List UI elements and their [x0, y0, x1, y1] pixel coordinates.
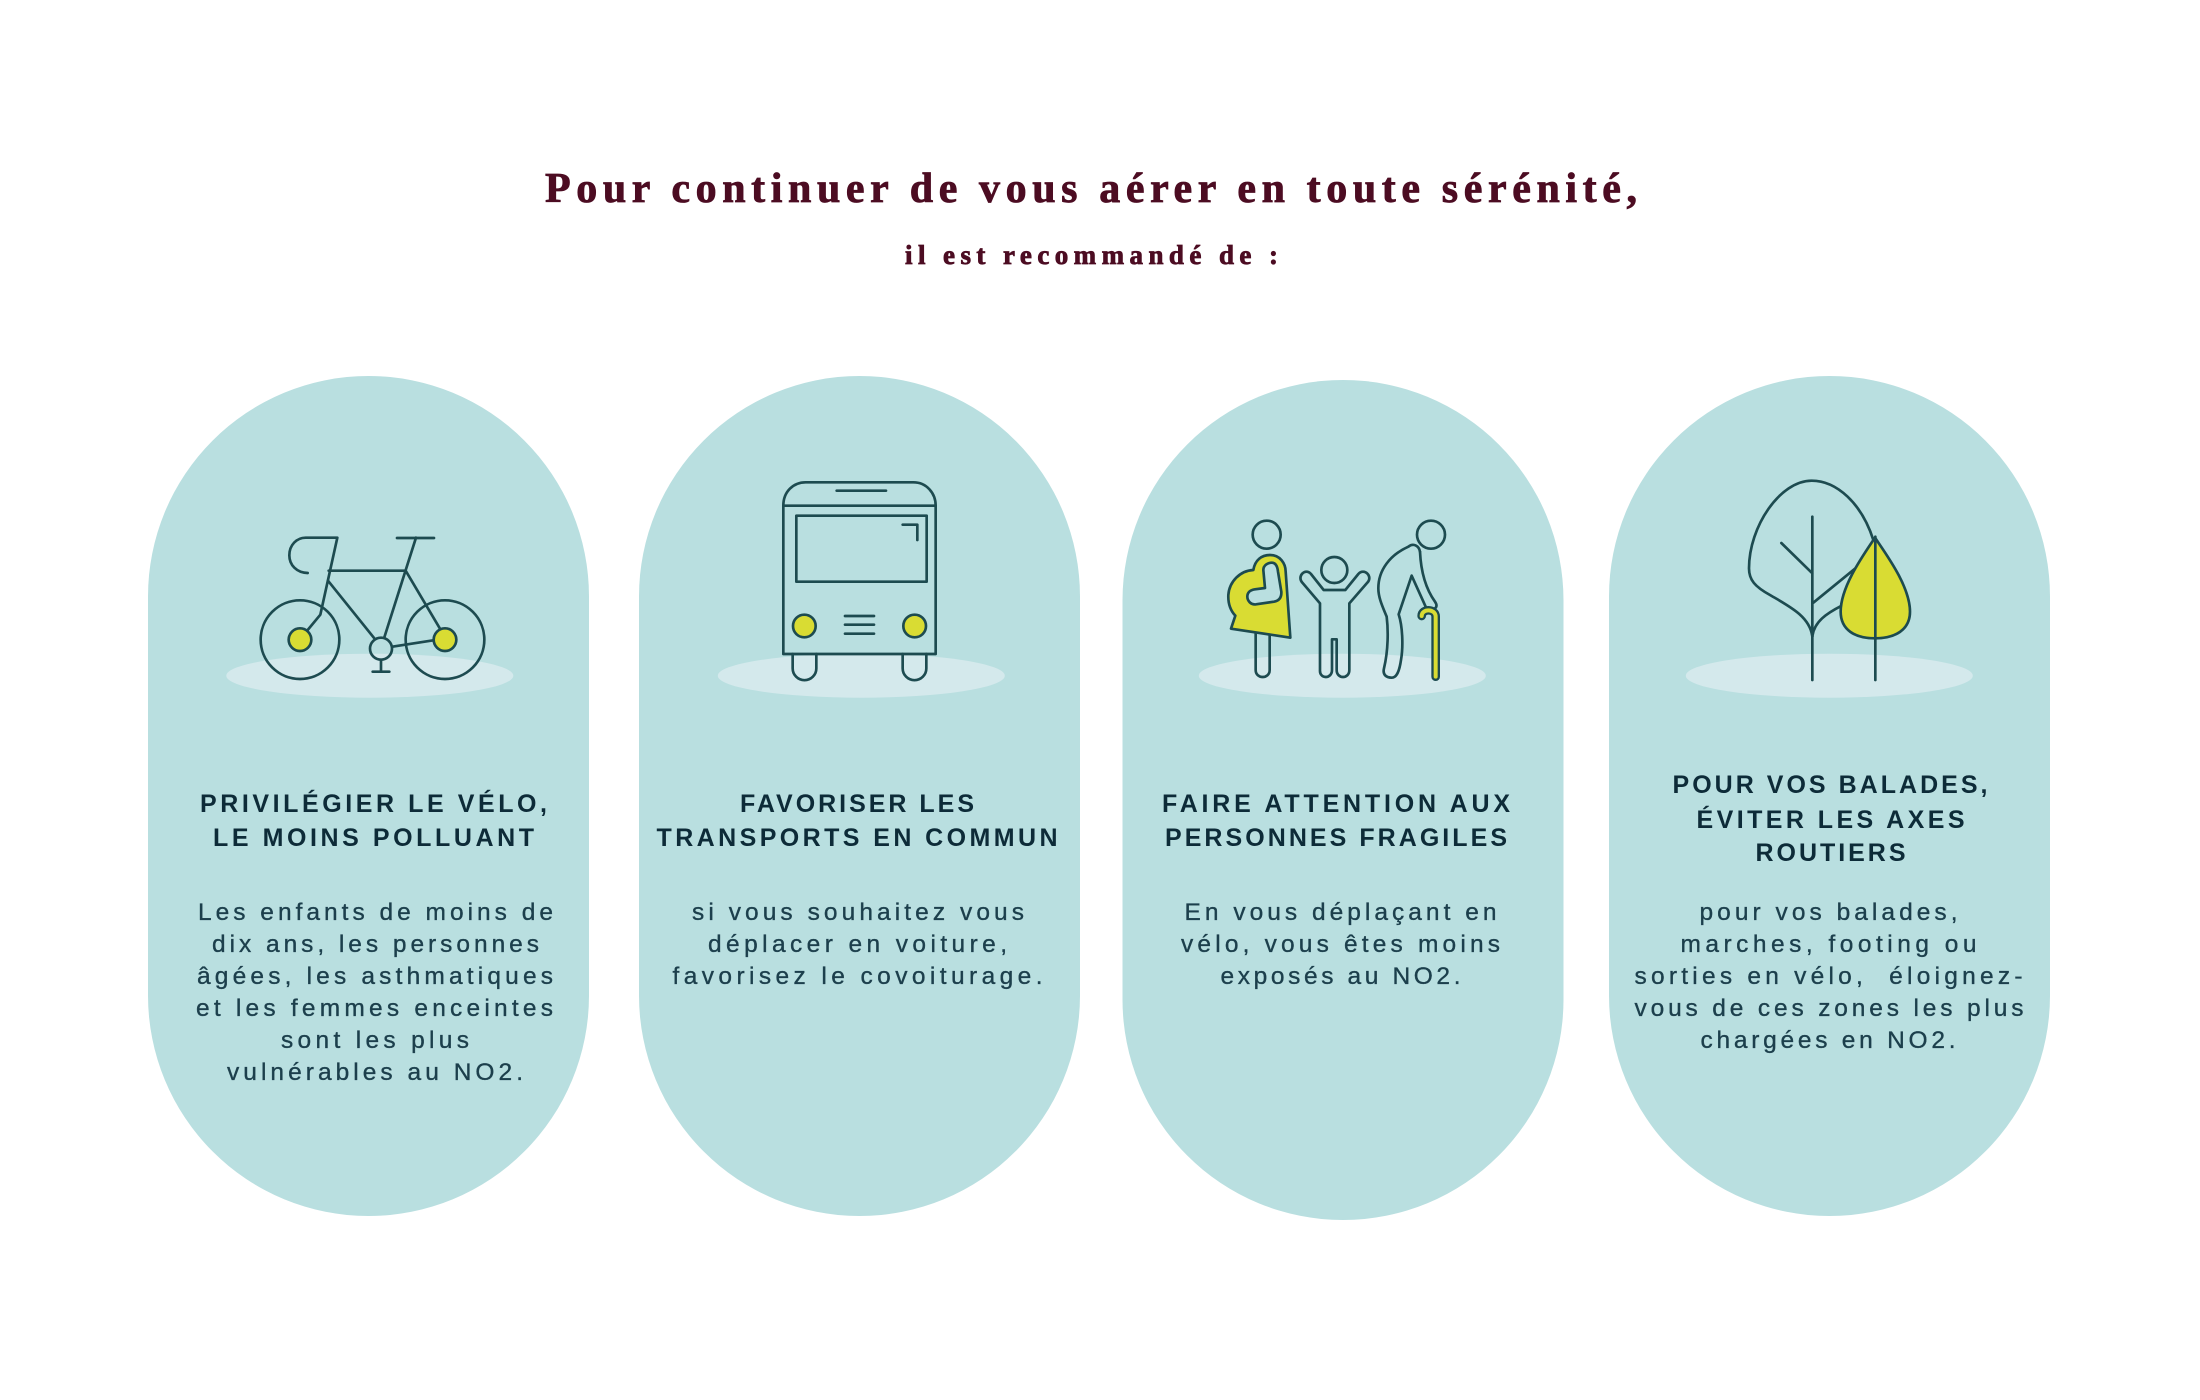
heading: PRIVILÉGIER LE VÉLO, — [200, 789, 547, 818]
body text: En vous déplaçant en — [1184, 899, 1496, 926]
card background — [1609, 376, 2050, 1216]
heading — [1162, 790, 1510, 852]
icon: bus — [783, 482, 936, 680]
body text: vélo, vous êtes moins — [1181, 931, 1500, 958]
heading — [1672, 771, 1988, 867]
ground ellipse — [1199, 654, 1486, 698]
heading: LE MOINS POLLUANT — [213, 824, 534, 852]
card background — [639, 376, 1080, 1216]
body text — [1181, 899, 1500, 990]
body text — [1634, 899, 2024, 1054]
body text: Les enfants de moins de — [198, 899, 553, 926]
body text: exposés au NO2. — [1220, 963, 1460, 990]
body text: âgées, les asthmatiques — [197, 963, 553, 990]
body text: pour vos balades, — [1700, 899, 1958, 926]
body text: si vous souhaitez vous — [692, 899, 1024, 926]
subtitle: il est recommandé de : — [905, 240, 1278, 270]
main title: Pour continuer de vous aérer en toute sérénité, — [545, 166, 1637, 212]
icon: bicycle — [261, 538, 484, 679]
body text: favorisez le covoiturage. — [672, 963, 1042, 990]
heading: ÉVITER LES AXES — [1696, 805, 1964, 834]
heading: ROUTIERS — [1756, 839, 1906, 867]
body text: et les femmes enceintes — [196, 995, 553, 1022]
body text — [672, 899, 1042, 990]
body text: vulnérables au NO2. — [227, 1059, 523, 1086]
ground ellipse — [718, 654, 1005, 698]
body text: marches, footing ou — [1680, 931, 1976, 958]
heading — [656, 790, 1058, 852]
title block — [545, 166, 1637, 270]
heading — [200, 789, 547, 852]
body text — [196, 899, 553, 1086]
card background — [148, 376, 589, 1216]
body text: sorties en vélo, éloignez- — [1634, 963, 2022, 990]
heading: TRANSPORTS EN COMMUN — [656, 824, 1058, 852]
panel: public transport — [639, 376, 1080, 1216]
ground ellipse — [226, 654, 513, 698]
panel: walks and trees — [1609, 376, 2050, 1216]
heading: PERSONNES FRAGILES — [1165, 824, 1507, 852]
panel: bicycle — [148, 376, 589, 1216]
icon: pregnant woman, child and elderly person — [1228, 521, 1445, 678]
heading: FAIRE ATTENTION AUX — [1162, 790, 1510, 818]
heading: FAVORISER LES — [740, 790, 974, 818]
body text: chargées en NO2. — [1700, 1027, 1956, 1054]
body text: dix ans, les personnes — [212, 931, 539, 958]
body text: sont les plus — [281, 1027, 469, 1054]
body text: vous de ces zones les plus — [1634, 995, 2024, 1022]
panel: vulnerable people — [1122, 380, 1564, 1220]
heading: POUR VOS BALADES, — [1672, 771, 1988, 799]
body text: déplacer en voiture, — [708, 931, 1007, 958]
icon: trees — [1749, 481, 1910, 680]
card background — [1122, 380, 1564, 1220]
ground ellipse — [1686, 654, 1973, 698]
